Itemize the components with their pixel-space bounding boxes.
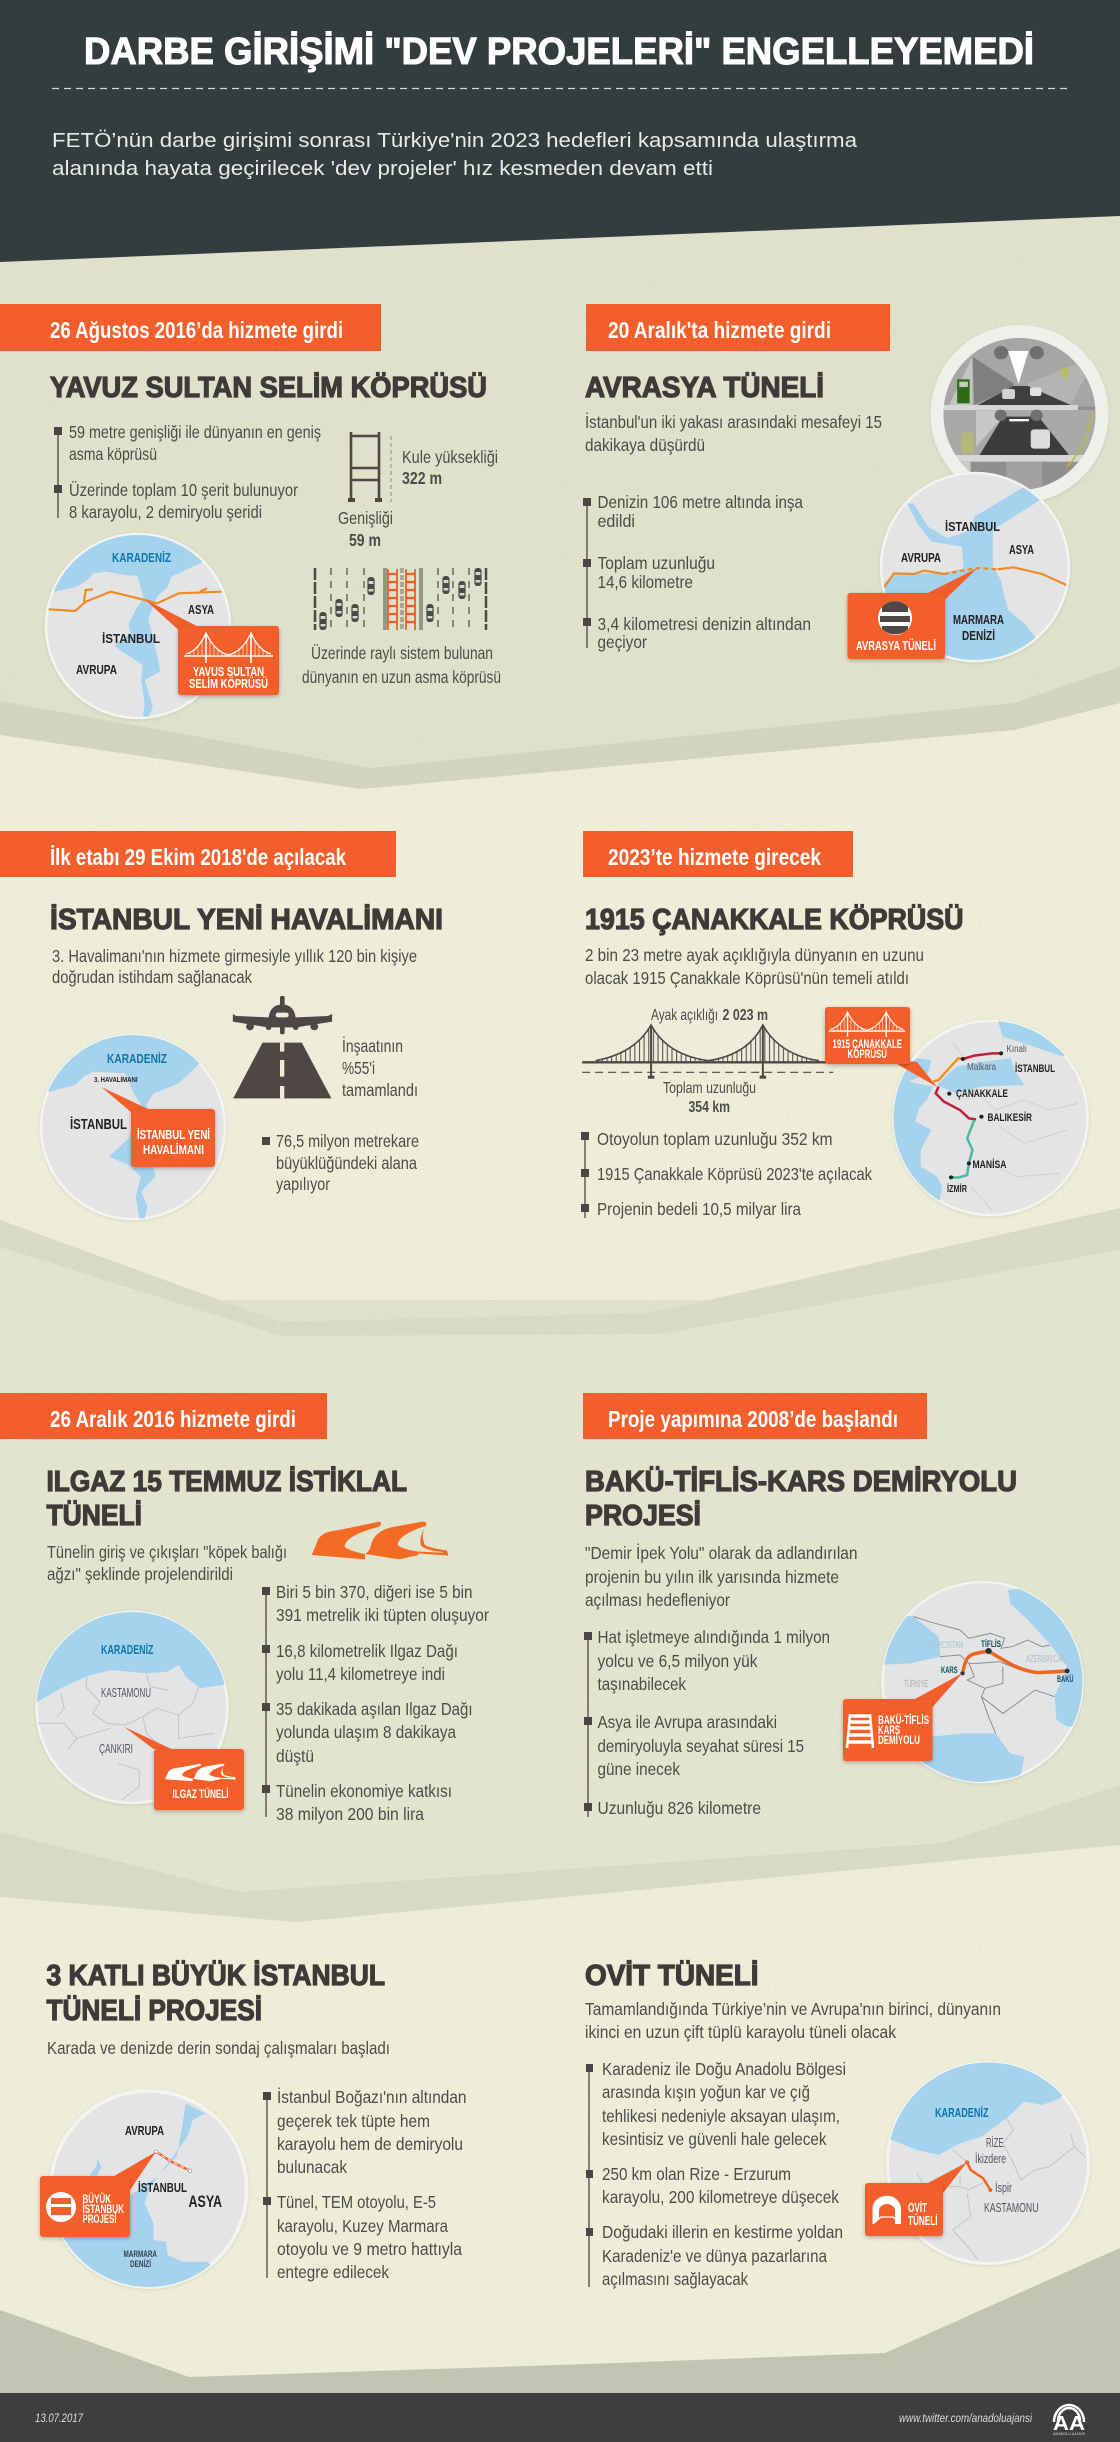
- map: Bakü-Tiflis-Kars: [843, 1580, 1089, 1787]
- bullet list: Biri 5 bin 370, diğeri ise 5 bin: [276, 1582, 472, 1602]
- map: Avrasya route: ASYA: [1009, 542, 1034, 557]
- map: Ilgaz: [36, 1610, 244, 1810]
- callout: Bakü-Tiflis-Kars: [843, 1699, 932, 1761]
- bullet list: [586, 2059, 846, 2289]
- map: Büyük İstanbul: ASYA: [188, 2192, 222, 2211]
- bullet list: İstanbul Boğazı'nın altından: [277, 2087, 466, 2107]
- map: Ovit: KASTAMONU: [984, 2201, 1038, 2215]
- bullet text: büyüklüğündeki alana: [276, 1153, 417, 1173]
- footer: [0, 2393, 1120, 2442]
- callout: Yavuz Sultan Selim: [178, 626, 279, 695]
- heading: [585, 1465, 1017, 1532]
- callout: İstanbul Yeni Havalimanı: [131, 1109, 215, 1167]
- bullet list: otoyolu ve 9 metro hattıyla: [277, 2239, 462, 2259]
- callout: Avrasya Tüneli: AVRASYA TÜNELİ: [856, 638, 936, 653]
- bullet list: karayolu, Kuzey Marmara: [277, 2216, 448, 2236]
- icon: shark mouth tunnel: [312, 1522, 448, 1559]
- bullet list: Otoyolun toplam uzunluğu 352 km: [597, 1129, 832, 1149]
- bullet list: [263, 2087, 466, 2282]
- map: Avrasya route: [848, 473, 1069, 673]
- intro text: dakikaya düşürdü: [585, 435, 705, 455]
- bullet list: Uzunluğu 826 kilometre: [598, 1798, 761, 1818]
- intro text: ikinci en uzun çift tüplü karayolu tüneli olacak: [585, 2022, 896, 2042]
- bullet list: Tünelin ekonomiye katkısı: [276, 1781, 452, 1801]
- intro text: FETÖ’nün darbe girişimi sonrası Türkiye'nin 2023 hedefleri kapsamında ulaştırma: [52, 130, 858, 152]
- bullet list: Üzerinde toplam 10 şerit bulunuyor: [69, 480, 298, 500]
- intro text: İstanbul'un iki yakası arasındaki mesafeyi 15: [585, 412, 882, 432]
- intro text: Tünelin giriş ve çıkışları "köpek balığı: [47, 1542, 287, 1562]
- intro text: doğrudan istihdam sağlanacak: [52, 967, 252, 987]
- intro text: açılması hedefleniyor: [585, 1590, 730, 1610]
- date tag: [0, 304, 381, 351]
- map: Avrasya route: AVRUPA: [901, 550, 941, 565]
- map: Büyük İstanbul: [36, 2091, 250, 2300]
- heading: BAKÜ-TİFLİS-KARS DEMİRYOLU: [585, 1465, 1017, 1498]
- bridge diagram: 354 km: [688, 1099, 730, 1116]
- map: Bakü-Tiflis-Kars: BAKÜ: [1057, 1674, 1074, 1684]
- map: İstanbul bridge route: İSTANBUL: [102, 631, 160, 646]
- bullet list: 250 km olan Rize - Erzurum: [602, 2164, 791, 2184]
- progress text: İnşaatının: [342, 1036, 403, 1056]
- map: Avrasya route: MARMARA: [953, 612, 1004, 627]
- heading: 1915 ÇANAKKALE KÖPRÜSÜ: [585, 903, 964, 936]
- bullet list: asma köprüsü: [69, 444, 157, 464]
- map: Bakü-Tiflis-Kars: TİFLİS: [981, 1639, 1001, 1649]
- heading: TÜNELİ PROJESİ: [46, 1994, 262, 2027]
- panel: 3 Katlı Büyük İstanbul Tüneli: [36, 1959, 467, 2300]
- date: 13.07.2017: [35, 2413, 83, 2425]
- bullet text: [262, 1131, 419, 1194]
- bullet list: [54, 422, 321, 522]
- map: Bakü-Tiflis-Kars: KARS: [941, 1665, 958, 1675]
- logo: AA: AA: [1053, 2413, 1085, 2435]
- source link: www.twitter.com/anadoluajansi: [899, 2413, 1032, 2425]
- map: Bakü-Tiflis-Kars: GÜRCİSTAN: [929, 1638, 963, 1651]
- logo: AA: [1053, 2405, 1085, 2436]
- map: Çanakkale route: Malkara: [967, 1061, 996, 1073]
- bridge diagram: Ayak açıklığı: [651, 1007, 718, 1024]
- map: Çanakkale route: Kınalı: [1006, 1043, 1027, 1055]
- bullet list: geçiyor: [598, 632, 647, 652]
- callout: Büyük İstanbul: BÜYÜK: [82, 2191, 111, 2206]
- callout: Bakü-Tiflis-Kars: DEMİYOLU: [878, 1734, 920, 1747]
- tower dimensions: 59 m: [349, 530, 381, 550]
- progress text: %55'i: [342, 1058, 375, 1078]
- bullet list: 38 milyon 200 bin lira: [276, 1804, 424, 1824]
- date tag: [0, 831, 396, 877]
- map: Çanakkale route: [825, 1007, 1089, 1215]
- bullet list: 59 metre genişliği ile dünyanın en geniş: [69, 422, 321, 442]
- bullet list: 8 karayolu, 2 demiryolu şeridi: [69, 502, 262, 522]
- date tag: 26 Ağustos 2016’da hizmete girdi: [50, 317, 343, 343]
- bullet list: demiryoluyla seyahat süresi 15: [598, 1736, 804, 1756]
- intro text: Karada ve denizde derin sondaj çalışmaları başladı: [47, 2038, 390, 2058]
- date tag: İlk etabı 29 Ekim 2018'de açılacak: [50, 844, 346, 870]
- header panel: [0, 0, 1120, 262]
- intro text: 2 bin 23 metre ayak açıklığıyla dünyanın en uzunu: [585, 945, 924, 965]
- bullet list: güne inecek: [598, 1759, 680, 1779]
- icon: bridge tower: [348, 432, 391, 502]
- date tag: [583, 1393, 927, 1439]
- bullet list: Tünel, TEM otoyolu, E-5: [277, 2192, 436, 2212]
- callout: Bakü-Tiflis-Kars: KARS: [878, 1725, 900, 1737]
- tower dimensions: [338, 447, 498, 550]
- map: Avrasya route: DENİZİ: [962, 628, 995, 643]
- map: Ilgaz: KASTAMONU: [101, 1686, 151, 1700]
- bullet list: [583, 492, 811, 652]
- road with rail lanes: [315, 568, 486, 630]
- date tag: 20 Aralık'ta hizmete girdi: [608, 317, 831, 343]
- bullet list: karayolu, 200 kilometreye düşecek: [602, 2187, 839, 2207]
- callout: İstanbul Yeni Havalimanı: HAVALİMANI: [143, 1142, 204, 1157]
- heading: AVRASYA TÜNELİ: [585, 371, 824, 404]
- bullet list: Doğudaki illerin en kestirme yoldan: [602, 2222, 843, 2242]
- bullet list: 16,8 kilometrelik Ilgaz Dağı: [276, 1641, 458, 1661]
- intro text: ağzı" şeklinde projelendirildi: [47, 1564, 233, 1584]
- panel: 1915 Çanakkale Köprüsü: [581, 831, 1089, 1219]
- intro text: [52, 130, 858, 180]
- caption: Üzerinde raylı sistem bulunan: [311, 643, 493, 663]
- intro text: Tamamlandığında Türkiye’nin ve Avrupa'nın birinci, dünyanın: [585, 1999, 1001, 2019]
- map: İstanbul airport: [36, 1030, 229, 1219]
- map: Çanakkale route: İSTANBUL: [1015, 1062, 1055, 1075]
- bridge diagram: 2 023 m: [722, 1007, 768, 1024]
- heading: PROJESİ: [585, 1500, 701, 1532]
- map: İstanbul bridge route: KARADENİZ: [112, 550, 171, 565]
- callout: 1915 Çanakkale: KÖPRÜSÜ: [848, 1048, 887, 1061]
- map: Ovit: İkizdere: [975, 2152, 1006, 2166]
- bullet list: Asya ile Avrupa arasındaki: [598, 1712, 777, 1732]
- callout: Yavuz Sultan Selim: SELİM KÖPRÜSÜ: [189, 676, 268, 691]
- heading: TÜNELİ: [46, 1499, 142, 1532]
- tower dimensions: Kule yüksekliği: [402, 447, 498, 467]
- bullet list: entegre edilecek: [277, 2262, 389, 2282]
- callout: 1915 Çanakkale: [825, 1007, 910, 1064]
- bullet list: [581, 1129, 872, 1219]
- heading: YAVUZ SULTAN SELİM KÖPRÜSÜ: [50, 371, 487, 404]
- bullet list: yolcu ve 6,5 milyon yük: [598, 1651, 758, 1671]
- logo: AA: ANADOLU AJANSI: [1053, 2432, 1085, 2436]
- map: İstanbul airport: KARADENİZ: [107, 1051, 167, 1066]
- bullet list: bulunacak: [277, 2157, 347, 2177]
- bullet list: 14,6 kilometre: [598, 572, 693, 592]
- illustration: tunnel cross-section: [930, 325, 1108, 503]
- map: Büyük İstanbul: MARMARA: [124, 2249, 157, 2260]
- intro text: alanında hayata geçirilecek 'dev projeler' hız kesmeden devam etti: [52, 158, 713, 180]
- intro text: 3. Havalimanı'nın hizmete girmesiyle yıllık 120 bin kişiye: [52, 946, 417, 966]
- bullet list: edildi: [598, 511, 635, 531]
- bullet list: 35 dakikada aşılan Ilgaz Dağı: [276, 1699, 472, 1719]
- map: Bakü-Tiflis-Kars: TÜRKİYE: [904, 1677, 928, 1690]
- intro text: [585, 945, 924, 988]
- map: Ilgaz: ÇANKIRI: [99, 1742, 133, 1756]
- bullet list: açılmasını sağlayacak: [602, 2269, 748, 2289]
- progress text: tamamlandı: [342, 1080, 418, 1100]
- map: Ovit: İspir: [995, 2181, 1012, 2195]
- date tag: [0, 1393, 327, 1439]
- callout: Yavuz Sultan Selim: YAVUS SULTAN: [193, 664, 264, 679]
- bullet text: 76,5 milyon metrekare: [276, 1131, 419, 1151]
- bullet list: 391 metrelik iki tüpten oluşuyor: [276, 1605, 489, 1625]
- callout: Bakü-Tiflis-Kars: BAKÜ-TİFLİS: [878, 1714, 929, 1727]
- map: İstanbul bridge route: [43, 523, 279, 718]
- bullet list: Denizin 106 metre altında inşa: [598, 492, 803, 512]
- callout: Ilgaz Tüneli: [154, 1749, 244, 1810]
- intro text: "Demir İpek Yolu" olarak da adlandırılan: [585, 1543, 858, 1563]
- heading: OVİT TÜNELİ: [585, 1959, 758, 1992]
- intro text: [585, 1999, 1001, 2042]
- callout: Avrasya Tüneli: [848, 593, 945, 659]
- callout: İstanbul Yeni Havalimanı: İSTANBUL YENİ: [137, 1127, 210, 1142]
- callout: Ovit Tüneli: TÜNELİ: [908, 2213, 938, 2228]
- callout: 1915 Çanakkale: 1915 ÇANAKKALE: [832, 1039, 902, 1051]
- intro text: [585, 412, 882, 455]
- map: Büyük İstanbul: AVRUPA: [125, 2123, 164, 2138]
- bullet list: 3,4 kilometresi denizin altından: [598, 614, 811, 634]
- panel: Ilgaz Tüneli: [0, 1393, 489, 1824]
- date tag: [583, 831, 853, 877]
- bullet list: Karadeniz ile Doğu Anadolu Bölgesi: [602, 2059, 846, 2079]
- panel: Ovit Tüneli: [585, 1959, 1096, 2289]
- panel: Bakü-Tiflis-Kars: [583, 1393, 1089, 1818]
- map: Büyük İstanbul: İSTANBUL: [138, 2180, 187, 2195]
- bullet list: 1915 Çanakkale Köprüsü 2023'te açılacak: [597, 1164, 872, 1184]
- callout: Büyük İstanbul: İSTANBUK: [82, 2201, 124, 2216]
- bullet list: geçerek tek tüpte hem: [277, 2111, 430, 2131]
- bridge diagram: [582, 1007, 833, 1116]
- date tag: [586, 304, 890, 351]
- tower dimensions: 322 m: [402, 468, 442, 488]
- callout: Büyük İstanbul: PROJESİ: [82, 2211, 116, 2226]
- panel: Avrasya Tüneli: [583, 304, 1108, 673]
- intro text: [47, 1542, 287, 1584]
- heading: [46, 1959, 385, 2027]
- bullet list: Karadeniz'e ve dünya pazarlarına: [602, 2246, 827, 2266]
- map: Çanakkale route: İZMİR: [947, 1182, 968, 1195]
- map: Bakü-Tiflis-Kars: AZERBAYCAN: [1026, 1654, 1066, 1665]
- title: DARBE GİRİŞİMİ "DEV PROJELERİ" ENGELLEYEMEDİ: [84, 31, 1034, 73]
- map: İstanbul airport: İSTANBUL: [70, 1116, 127, 1133]
- map: İstanbul airport: 3. HAVALİMANI: [94, 1075, 138, 1084]
- heading: İSTANBUL YENİ HAVALİMANI: [50, 904, 443, 936]
- map: Ilgaz: KARADENİZ: [101, 1642, 154, 1657]
- panel: İstanbul Yeni Havalimanı: [0, 831, 443, 1219]
- intro text: [52, 946, 417, 987]
- caption: dünyanın en uzun asma köprüsü: [302, 667, 501, 687]
- heading: 3 KATLI BÜYÜK İSTANBUL: [46, 1959, 385, 1992]
- map: Çanakkale route: ÇANAKKALE: [956, 1088, 1008, 1100]
- bullet list: tehlikesi nedeniyle aksayan ulaşım,: [602, 2106, 840, 2126]
- map: Çanakkale route: MANİSA: [972, 1158, 1007, 1171]
- tower dimensions: Genişliği: [338, 508, 393, 528]
- bullet list: [262, 1582, 489, 1824]
- date tag: 26 Aralık 2016 hizmete girdi: [50, 1406, 296, 1432]
- bullet list: karayolu hem de demiryolu: [277, 2134, 463, 2154]
- map: Avrasya route: İSTANBUL: [945, 519, 1000, 534]
- heading: [46, 1466, 407, 1532]
- callout: Ovit Tüneli: [865, 2183, 943, 2236]
- caption: [302, 643, 501, 687]
- map: Ovit: [865, 2057, 1096, 2264]
- date tag: 2023’te hizmete girecek: [608, 844, 821, 870]
- intro text: [585, 1543, 858, 1610]
- heading: ILGAZ 15 TEMMUZ İSTİKLAL: [46, 1466, 407, 1498]
- bullet list: düştü: [276, 1746, 314, 1766]
- bullet list: Projenin bedeli 10,5 milyar lira: [597, 1199, 801, 1219]
- panel: Yavuz Sultan Selim Köprüsü: [0, 304, 501, 718]
- date tag: Proje yapımına 2008’de başlandı: [608, 1406, 898, 1432]
- intro text: olacak 1915 Çanakkale Köprüsü'nün temeli atıldı: [585, 968, 909, 988]
- map: Çanakkale route: BALIKESİR: [988, 1111, 1032, 1124]
- map: İstanbul bridge route: ASYA: [188, 602, 214, 617]
- bullet list: yolunda ulaşım 8 dakikaya: [276, 1722, 456, 1742]
- map: Ovit: RİZE: [986, 2136, 1004, 2150]
- intro text: projenin bu yılın ilk yarısında hizmete: [585, 1567, 839, 1587]
- callout: Ovit Tüneli: OVİT: [908, 2200, 927, 2215]
- map: Büyük İstanbul: DENİZİ: [130, 2259, 151, 2270]
- bullet text: yapılıyor: [276, 1174, 330, 1194]
- icon: plane and runway: [233, 996, 332, 1098]
- callout: Ilgaz Tüneli: ILGAZ TÜNELİ: [172, 1786, 228, 1801]
- map: Ovit: KARADENİZ: [935, 2105, 989, 2120]
- bullet list: Toplam uzunluğu: [598, 553, 715, 573]
- bullet list: yolu 11,4 kilometreye indi: [276, 1664, 445, 1684]
- callout: Büyük İstanbul: [40, 2176, 130, 2237]
- bullet list: arasında kışın yoğun kar ve çığ: [602, 2082, 810, 2102]
- bullet list: taşınabilecek: [598, 1674, 686, 1694]
- bullet list: Hat işletmeye alındığında 1 milyon: [598, 1627, 830, 1647]
- bullet list: [584, 1627, 830, 1818]
- progress text: [342, 1036, 418, 1100]
- bullet list: kesintisiz ve güvenli hale gelecek: [602, 2129, 827, 2149]
- bridge diagram: Toplam uzunluğu: [663, 1080, 756, 1097]
- map: İstanbul bridge route: AVRUPA: [76, 662, 117, 677]
